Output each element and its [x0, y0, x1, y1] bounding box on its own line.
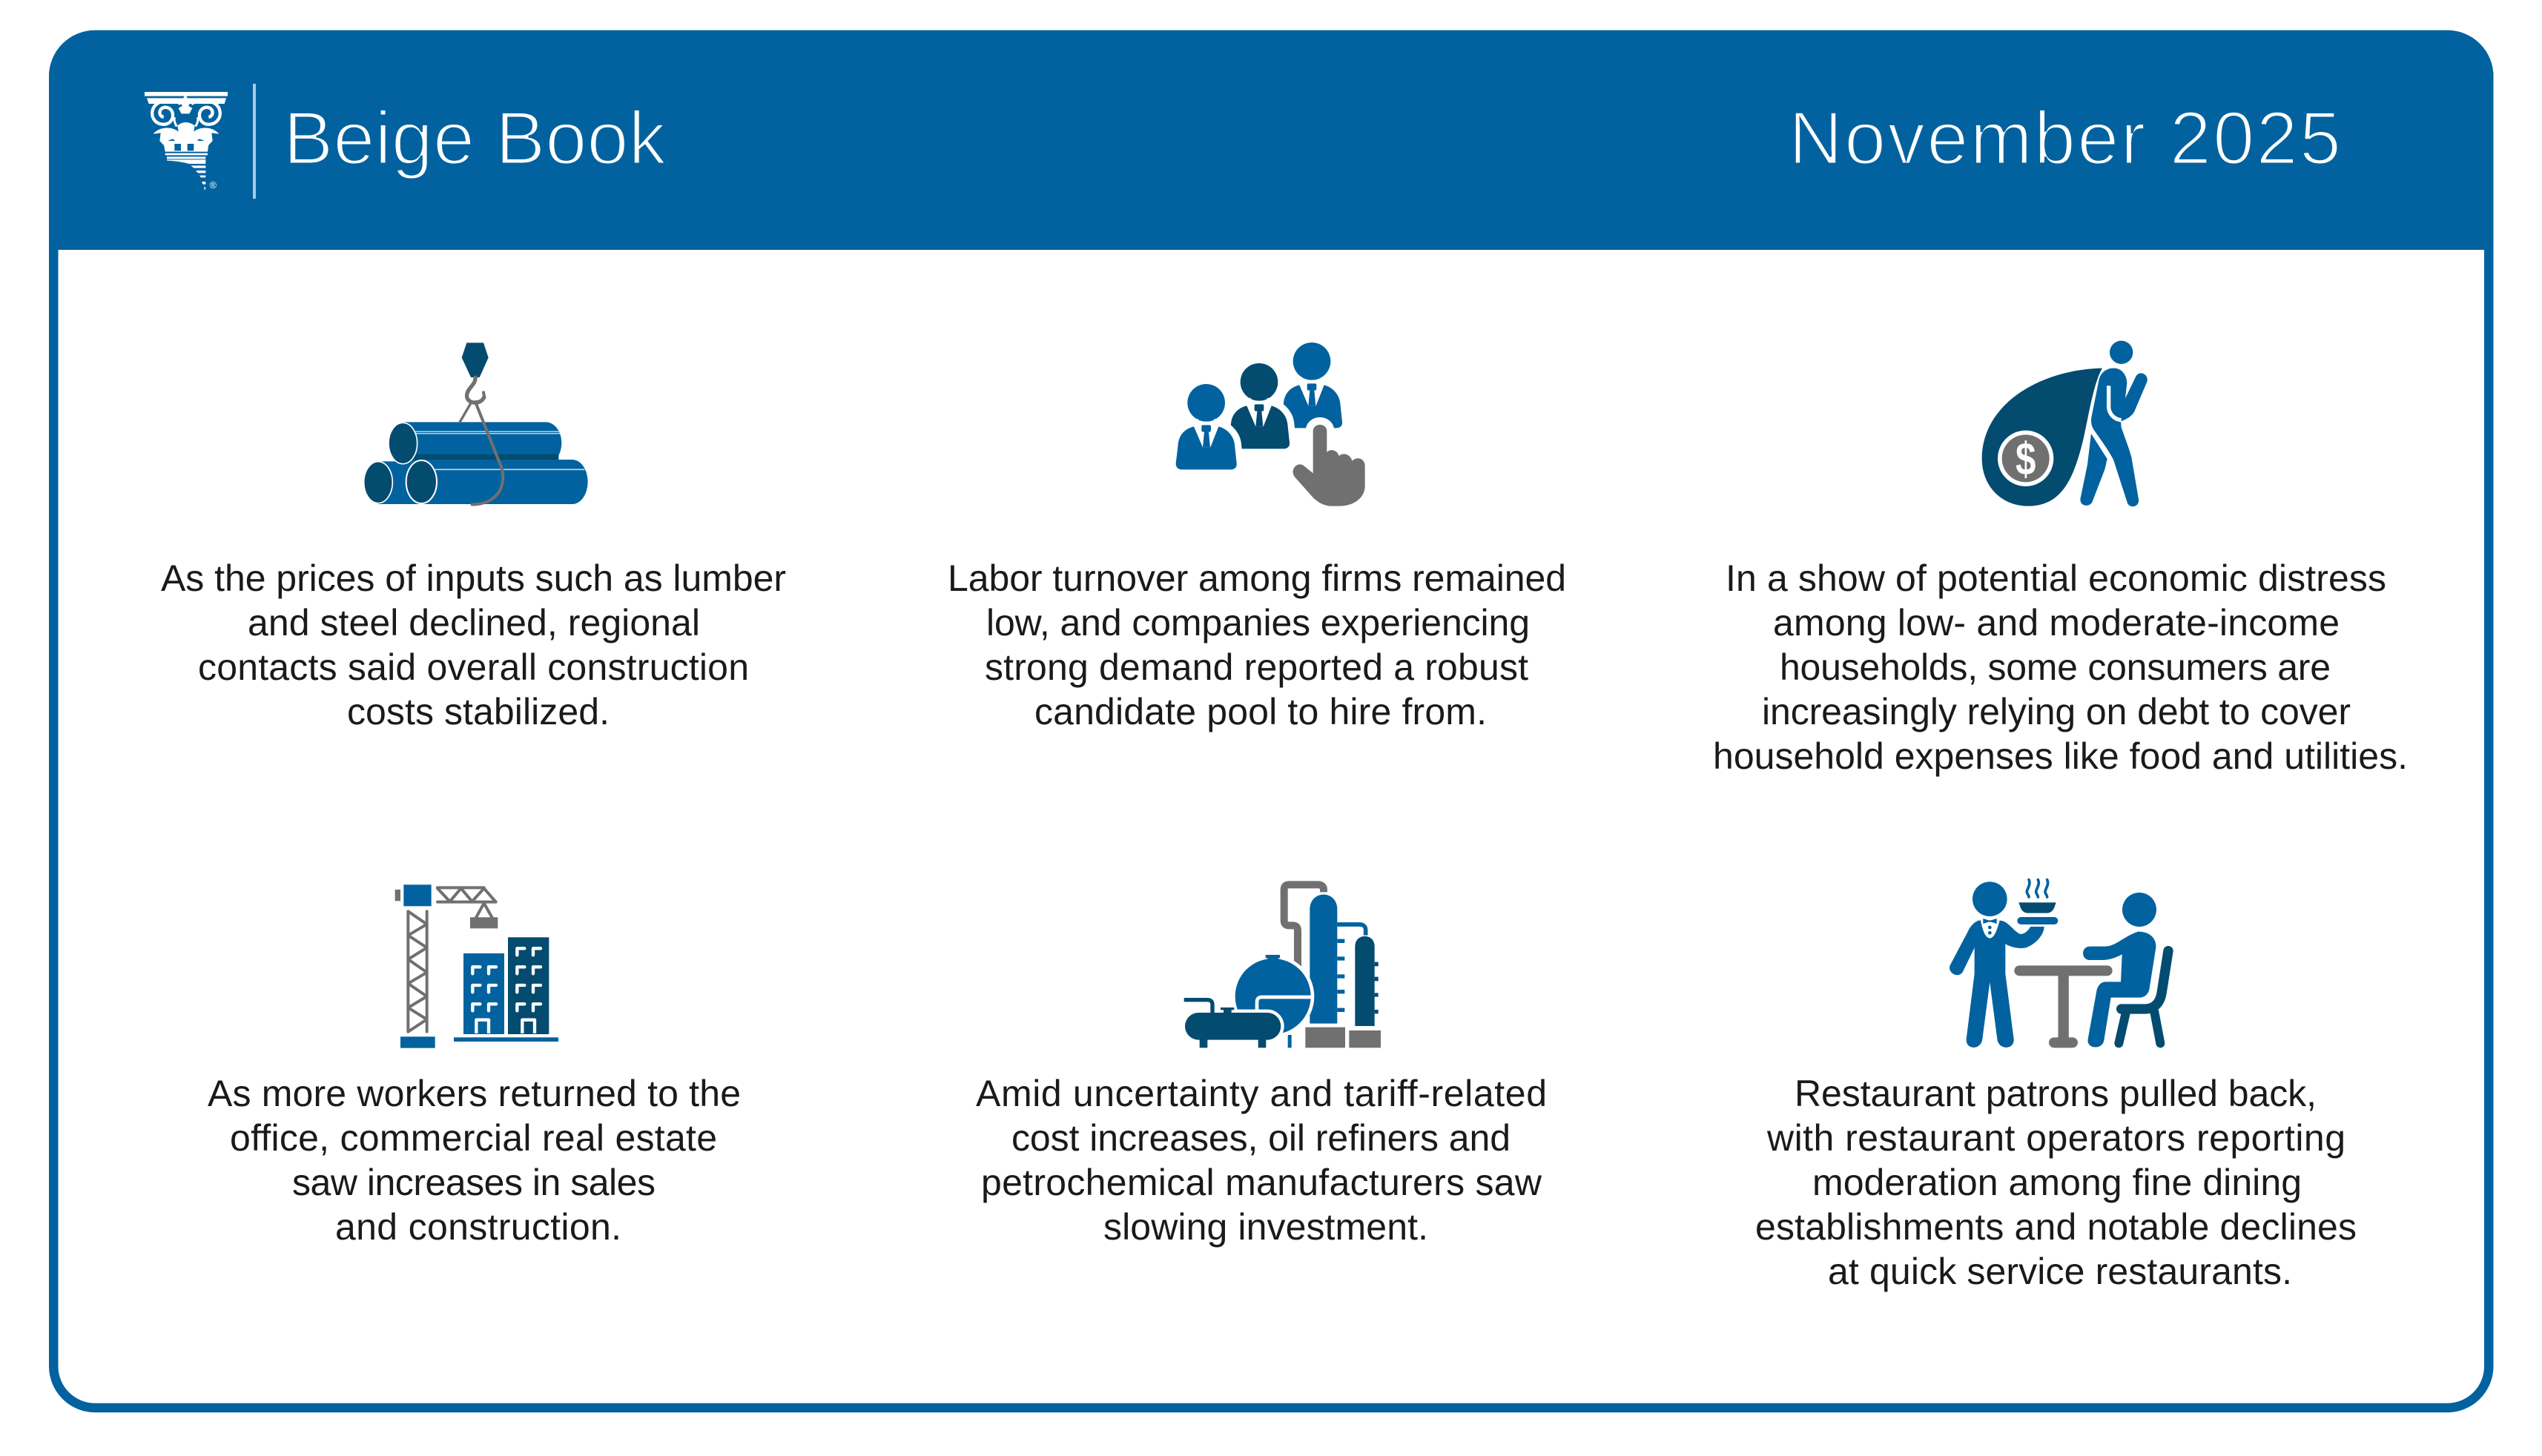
text: oil refiners: slowing investment. [1103, 1206, 1428, 1248]
text: oil refiners [976, 1073, 1547, 1248]
panel: labor [948, 343, 1566, 732]
text: restaurants: at quick service restaurants. [1828, 1251, 2292, 1292]
text: consumer debt: In a show of potential economic distress [1726, 557, 2386, 599]
text: commercial real estate [208, 1073, 741, 1248]
text: restaurants: with restaurant operators reporting [1766, 1117, 2345, 1159]
logo divider [253, 84, 256, 199]
panel: construction costs [161, 343, 786, 732]
icon: person dragging money bag [1982, 341, 2148, 506]
text: restaurants: moderation among fine dining [1812, 1162, 2302, 1203]
text: oil refiners: petrochemical manufacturers saw [981, 1162, 1542, 1203]
text: construction costs: and steel declined, regional [248, 602, 700, 643]
icon: Federal Reserve column logo: ® [210, 180, 217, 191]
text: labor: strong demand reported a robust [985, 646, 1528, 688]
text: commercial real estate: and construction. [335, 1206, 621, 1248]
text: commercial real estate: As more workers returned to the [208, 1073, 741, 1114]
text: commercial real estate: office, commercial real estate [230, 1117, 717, 1159]
text: consumer debt: household expenses like food and utilities. [1713, 735, 2408, 777]
title: Beige Book [283, 97, 666, 180]
icon: Federal Reserve column logo [145, 92, 228, 191]
text: oil refiners: Amid uncertainty and tariff-related [976, 1073, 1547, 1114]
panel: oil refiners [976, 884, 1547, 1248]
icon: crane and office buildings [395, 884, 558, 1048]
icon: waiter serving seated diner [1950, 880, 2168, 1048]
text: construction costs: contacts said overall construction [198, 646, 749, 688]
panel: consumer debt [1713, 341, 2408, 777]
text: consumer debt: among low- and moderate-income [1773, 602, 2340, 643]
icon: hand selecting from group of workers [1176, 343, 1365, 506]
text: restaurants [1755, 1073, 2357, 1292]
text: construction costs [161, 557, 786, 732]
panel: commercial real estate [208, 884, 741, 1248]
text: oil refiners: cost increases, oil refiners and [1011, 1117, 1511, 1159]
panel: restaurants [1755, 880, 2357, 1292]
icon: refinery towers and tanks [1184, 884, 1381, 1048]
text: restaurants: Restaurant patrons pulled back, [1795, 1073, 2317, 1114]
date: November 2025 [1789, 97, 2341, 180]
text: commercial real estate: saw increases in sales [292, 1162, 656, 1203]
text: construction costs: As the prices of inputs such as lumber [161, 557, 786, 599]
text: restaurants: establishments and notable declines [1755, 1206, 2357, 1248]
text: labor [948, 557, 1566, 732]
text: consumer debt: households, some consumers are [1780, 646, 2331, 688]
text: labor: candidate pool to hire from. [1034, 691, 1487, 732]
text: construction costs: costs stabilized. [347, 691, 610, 732]
icon: person dragging money bag: $ [2016, 433, 2036, 485]
header band [49, 30, 2493, 250]
text: labor: low, and companies experiencing [986, 602, 1530, 643]
text: consumer debt: increasingly relying on debt to cover [1762, 691, 2351, 732]
text: labor: Labor turnover among firms remained [948, 557, 1566, 599]
icon: pipes lifted by crane hook [364, 343, 588, 505]
text: consumer debt [1713, 557, 2408, 777]
